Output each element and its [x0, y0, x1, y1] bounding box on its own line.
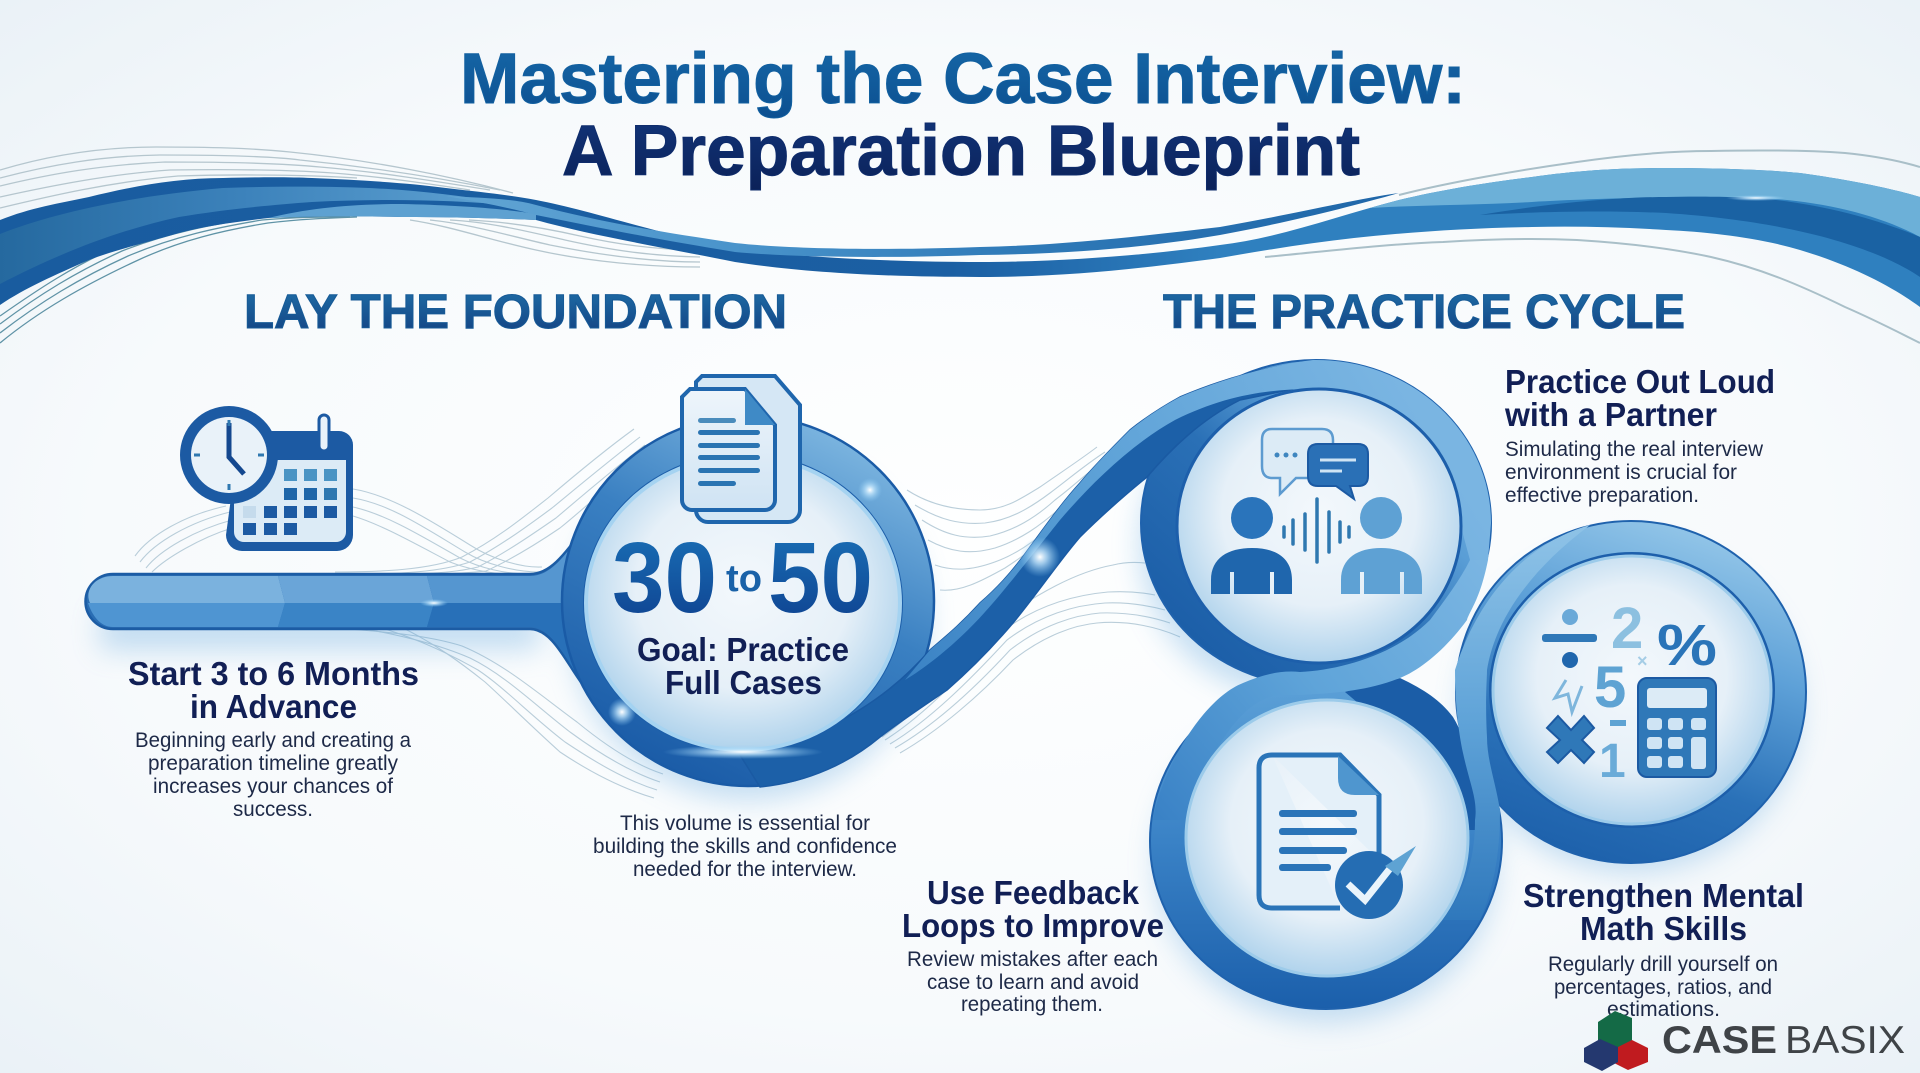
ring: mental math: [1456, 521, 1806, 863]
text: feedback loops: Use Feedback: [927, 874, 1140, 911]
logo: casebasix: [1584, 1011, 1905, 1071]
text: start early: preparation timeline greatly: [148, 752, 398, 775]
text: start early: Beginning early and creating a: [135, 729, 411, 752]
text: feedback loops: Review mistakes after each: [907, 948, 1158, 971]
goal label: Full Cases: [665, 664, 822, 701]
decorative thin curves around the timeline and ribbon: [135, 429, 1180, 798]
icon: clock and calendar: [180, 406, 353, 551]
icon: document with check: [1259, 755, 1416, 919]
band linking feedback ring top to practice ring: [1153, 560, 1488, 820]
text: practice out loud: effective preparation.: [1505, 484, 1699, 507]
text: volume note: [593, 812, 897, 881]
heading: lay the foundation: LAY THE FOUNDATION: [244, 286, 787, 339]
text: mental math: Math Skills: [1580, 910, 1747, 947]
text: start early: increases your chances of: [153, 775, 393, 798]
heading: the practice cycle: THE PRACTICE CYCLE: [1163, 286, 1685, 339]
text: volume note: needed for the interview.: [633, 858, 857, 881]
text: volume note: building the skills and confidence: [593, 835, 897, 858]
goal stat: 30 to 50: 50: [768, 522, 873, 634]
text: practice out loud: Simulating the real interview: [1505, 438, 1764, 461]
text: start early: [128, 655, 419, 821]
icon: math symbols and calculator: 1: [1599, 735, 1626, 788]
ring: practice out loud body: [1141, 360, 1491, 686]
text: practice out loud: Practice Out Loud: [1505, 363, 1775, 400]
timeline bar: [86, 520, 600, 700]
goal ring body: [562, 416, 934, 786]
text: feedback loops: [902, 874, 1164, 1016]
icon: conversation: [1211, 429, 1422, 594]
icon: math symbols and calculator: ×: [1637, 651, 1648, 671]
icon: math symbols and calculator: [1542, 596, 1717, 788]
text: practice out loud: [1504, 363, 1775, 507]
ring: feedback loops body: [1150, 673, 1502, 1009]
text: volume note: This volume is essential for: [620, 812, 870, 835]
text: feedback loops: case to learn and avoid: [927, 971, 1139, 994]
ribbon from goal ring to practice ring: [740, 360, 1491, 787]
text: feedback loops: Loops to Improve: [902, 907, 1164, 944]
text: mental math: percentages, ratios, and: [1554, 976, 1772, 999]
lens: feedback loops: [1186, 700, 1468, 976]
goal stat: 30 to 50: [612, 522, 873, 634]
decorative thin curves behind the header wave: [0, 147, 1920, 343]
icon: math symbols and calculator: 2: [1611, 596, 1643, 661]
text: start early: Start 3 to 6 Months: [128, 655, 419, 692]
text: mental math: estimations.: [1607, 998, 1720, 1021]
text: start early: in Advance: [190, 688, 357, 725]
ribbon strip joining feedback ring to math ring: [1443, 525, 1590, 920]
ring shadows: [100, 395, 1799, 1022]
goal stat: 30 to 50: to: [726, 558, 762, 600]
text: mental math: Regularly drill yourself on: [1548, 953, 1778, 976]
icon: math symbols and calculator: %: [1657, 613, 1717, 678]
text: practice out loud: environment is crucial for: [1505, 461, 1737, 484]
text: mental math: Strengthen Mental: [1523, 877, 1804, 914]
goal ring lens: [583, 453, 903, 759]
title: A Preparation Blueprint: [562, 112, 1360, 191]
text: mental math: [1523, 877, 1804, 1021]
lens: practice out loud: [1177, 389, 1461, 663]
text: feedback loops: repeating them.: [961, 993, 1103, 1016]
text: start early: success.: [233, 798, 313, 821]
title: Mastering the Case Interview:: [460, 40, 1466, 119]
title: [460, 40, 1466, 191]
goal stat: 30 to 50: 30: [612, 522, 717, 634]
goal label: [637, 631, 849, 701]
icon: document stack: [682, 376, 800, 522]
header wave ribbon: [0, 168, 1920, 307]
icon: math symbols and calculator: 5: [1594, 655, 1626, 720]
goal label: Goal: Practice: [637, 631, 849, 668]
text: practice out loud: with a Partner: [1504, 396, 1717, 433]
logo: casebasix: CASE: [1662, 1019, 1777, 1062]
logo: casebasix: BASIX: [1785, 1019, 1905, 1062]
dark connector between feedback and math rings: [1345, 678, 1482, 830]
